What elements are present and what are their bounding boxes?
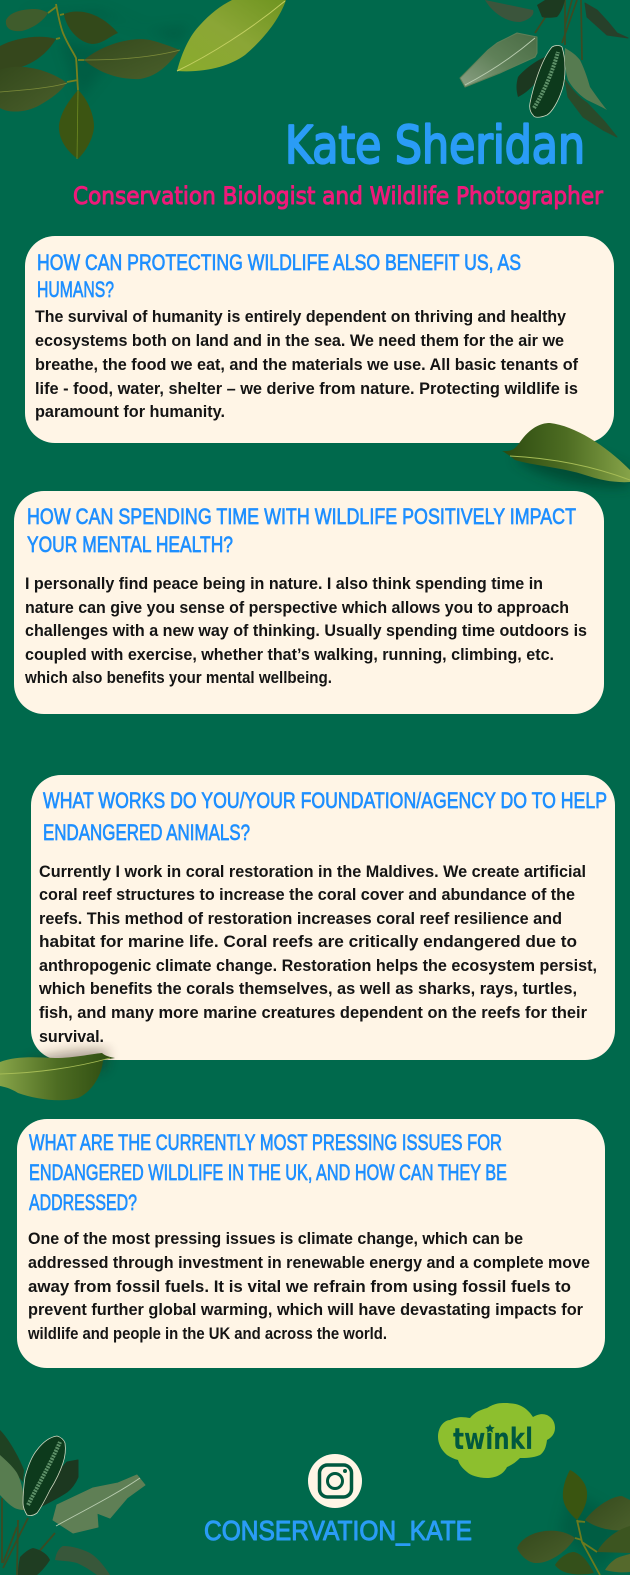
body text: habitat for marine life. Coral reefs are critically endangered due to: [39, 932, 577, 951]
twinkl logo: twinkl: [453, 1422, 533, 1456]
panel: UK issues: [17, 1119, 605, 1368]
instagram handle: CONSERVATION_KATE: [204, 1515, 472, 1546]
panel: mental health: [14, 491, 604, 714]
body text: The survival of humanity is entirely dependent on thriving and healthy: [35, 307, 567, 326]
body text: I personally find peace being in nature. I also think spending time in: [25, 574, 543, 593]
heading: [43, 788, 607, 845]
heading: [37, 250, 521, 302]
body text: [35, 307, 578, 421]
body text: prevent further global warming, which will have devastating impacts for: [28, 1300, 583, 1319]
body text: fish, and many more marine creatures dependent on the reefs for their: [39, 1003, 587, 1022]
body text: coral reef structures to increase the coral cover and abundance of the: [39, 885, 575, 904]
top-left leaves: [0, 0, 286, 159]
body text: [38, 862, 597, 1046]
body text: anthropogenic climate change. Restoration helps the ecosystem persist,: [39, 956, 597, 975]
body text: paramount for humanity.: [35, 402, 225, 421]
body text: [27, 1229, 590, 1343]
icon: instagram: [308, 1454, 362, 1508]
body text: coupled with exercise, whether that’s walking, running, climbing, etc.: [25, 645, 554, 664]
body text: survival.: [39, 1027, 104, 1046]
body text: away from fossil fuels. It is vital we refrain from using fossil fuels to: [28, 1277, 571, 1296]
heading: HUMANS?: [37, 277, 114, 302]
leaf overlapping third panel: [0, 1050, 115, 1100]
heading: YOUR MENTAL HEALTH?: [27, 532, 233, 557]
body text: Currently I work in coral restoration in the Maldives. We create artificial: [39, 862, 586, 881]
body text: life - food, water, shelter – we derive from nature. Protecting wildlife is: [35, 379, 578, 398]
panel: protecting wildlife: [25, 236, 614, 443]
body text: breathe, the food we eat, and the materials we use. All basic tenants of: [35, 355, 578, 374]
heading: [29, 1130, 507, 1215]
panel: endangered animals work: [31, 775, 615, 1060]
body text: ecosystems both on land and in the sea. We need them for the air we: [35, 331, 564, 350]
heading: ADDRESSED?: [29, 1190, 137, 1215]
body text: nature can give you sense of perspective which allows you to approach: [25, 598, 569, 617]
twinkl logo: [438, 1403, 555, 1478]
body text: One of the most pressing issues is climate change, which can be: [28, 1229, 523, 1248]
body text: wildlife and people in the UK and across the world.: [27, 1324, 387, 1343]
leaf overlapping first panel: [502, 423, 630, 487]
body text: which also benefits your mental wellbeing.: [24, 668, 332, 687]
body text: [24, 574, 587, 687]
top-right leaves: [460, 0, 628, 137]
bottom-right leaves: [517, 1470, 630, 1575]
heading: ENDANGERED ANIMALS?: [43, 820, 250, 845]
heading: [27, 504, 576, 557]
body text: reefs. This method of restoration increases coral reef resilience and: [39, 909, 562, 928]
body text: addressed through investment in renewable energy and a complete move: [28, 1253, 590, 1272]
bottom-left leaves: [0, 1430, 145, 1575]
body text: challenges with a new way of thinking. Usually spending time outdoors is: [25, 621, 587, 640]
body text: which benefits the corals themselves, as well as sharks, rays, turtles,: [38, 979, 577, 998]
